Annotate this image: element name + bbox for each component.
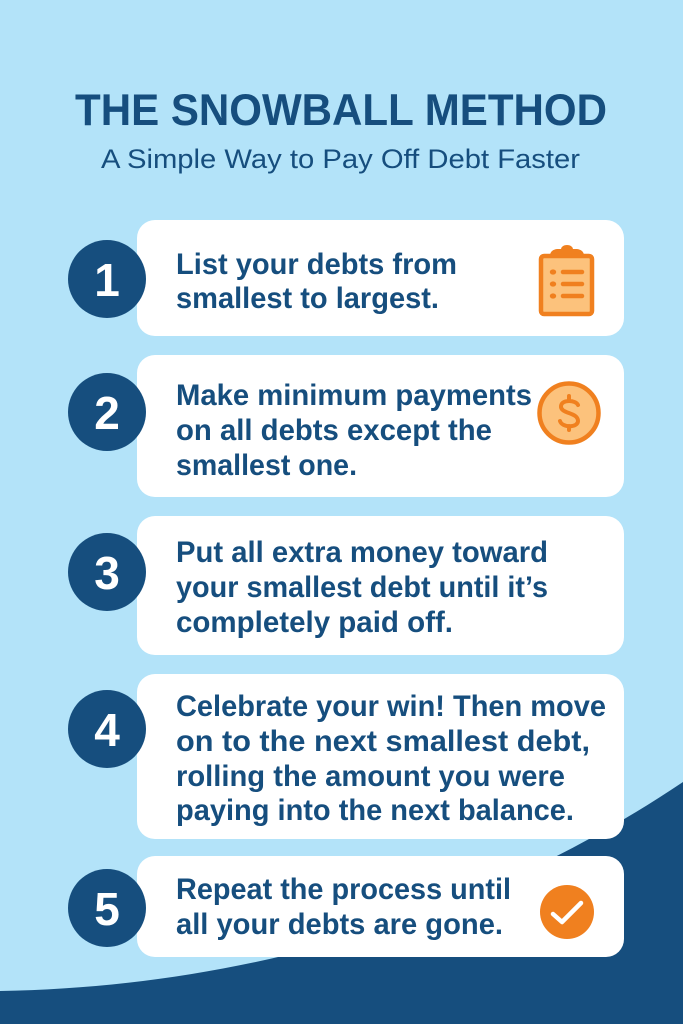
step 2 text: smallest one. xyxy=(176,449,357,482)
step 1 text xyxy=(176,248,457,315)
step 5 text xyxy=(176,873,511,941)
step 3 xyxy=(68,516,624,655)
number badge 1: 1 xyxy=(94,254,120,306)
step 4 text xyxy=(176,690,606,827)
step 4 text: rolling the amount you were xyxy=(176,760,565,793)
step 3 text: your smallest debt until it’s xyxy=(176,571,548,604)
card 2 xyxy=(137,355,624,497)
step 1 text: smallest to largest. xyxy=(176,282,439,315)
icon: dollar coin xyxy=(540,384,598,442)
card 5 xyxy=(137,856,624,957)
step 2 text: Make minimum payments xyxy=(176,379,532,412)
card 3 xyxy=(137,516,624,655)
number badge 5 xyxy=(68,869,146,947)
title: THE SNOWBALL METHOD xyxy=(75,86,607,135)
number badge 1 xyxy=(68,240,146,318)
card 4 xyxy=(137,674,624,839)
number badge 5: 5 xyxy=(94,883,120,935)
step 4 text: paying into the next balance. xyxy=(176,794,574,827)
step 4 xyxy=(68,674,624,839)
number badge 2: 2 xyxy=(94,387,120,439)
card 1 xyxy=(137,220,624,336)
step 2 xyxy=(68,355,624,497)
step 3 text: Put all extra money toward xyxy=(176,536,548,569)
icon: check mark xyxy=(540,885,594,939)
step 4 text: Celebrate your win! Then move xyxy=(176,690,606,723)
step 5 xyxy=(68,856,624,957)
step 3 text: completely paid off. xyxy=(176,606,453,639)
number badge 2 xyxy=(68,373,146,451)
step 2 text: on all debts except the xyxy=(176,414,492,447)
step 2 text xyxy=(176,379,532,482)
number badge 3 xyxy=(68,533,146,611)
number badge 4 xyxy=(68,690,146,768)
number badge 3: 3 xyxy=(94,547,120,599)
dark blue corner wave xyxy=(0,782,683,1024)
step 1 text: List your debts from xyxy=(176,248,457,281)
step 4 text: on to the next smallest debt, xyxy=(176,725,590,758)
step 3 text xyxy=(176,536,548,639)
subtitle: A Simple Way to Pay Off Debt Faster xyxy=(101,144,580,174)
step 5 text: Repeat the process until xyxy=(176,873,511,906)
icon: clipboard xyxy=(541,245,592,314)
number badge 4: 4 xyxy=(94,704,120,756)
step 5 text: all your debts are gone. xyxy=(176,908,503,941)
step 1 xyxy=(68,220,624,336)
